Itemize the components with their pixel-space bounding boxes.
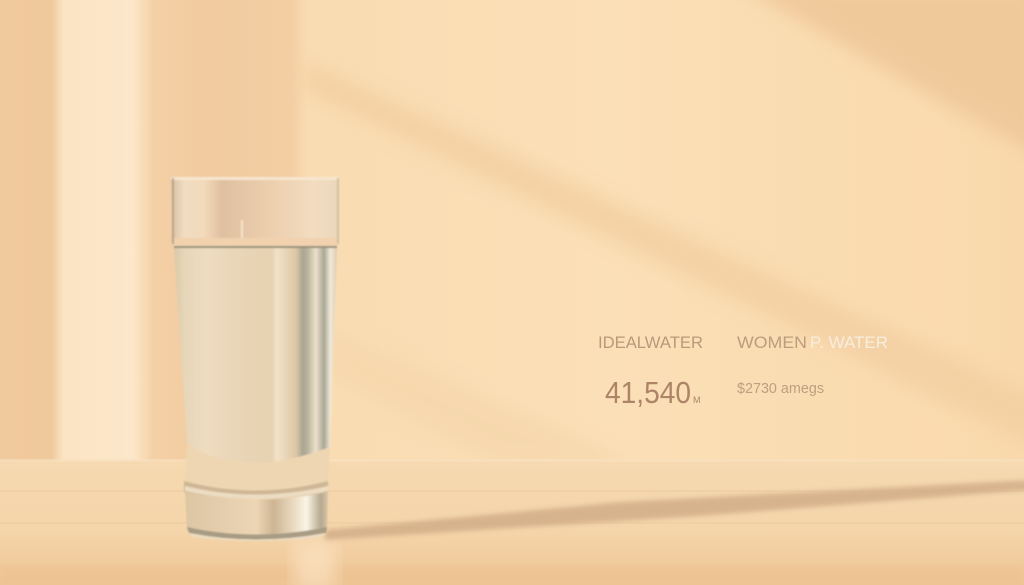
label: ideal water: IDEALWATER <box>598 333 703 352</box>
glass upper rim section <box>171 178 339 244</box>
lower clear glass <box>185 443 330 492</box>
icon: glass of water <box>171 177 339 541</box>
thick glass base <box>185 492 328 539</box>
wooden table <box>0 459 1024 585</box>
text block: women water <box>737 333 888 397</box>
text block: women water: P. WATER <box>810 333 888 352</box>
text block: ideal water <box>598 333 703 410</box>
value: $2730 amegs: $2730 amegs <box>737 381 824 397</box>
label: women water: WOMEN <box>737 333 807 352</box>
base ring <box>184 481 328 499</box>
water body <box>174 248 337 463</box>
value: 41,540 M: 41,540 <box>605 375 691 410</box>
water surface <box>174 238 337 248</box>
background wall <box>0 0 1024 465</box>
value: 41,540 M: M <box>693 395 700 405</box>
glass shadow on table <box>325 480 1024 540</box>
